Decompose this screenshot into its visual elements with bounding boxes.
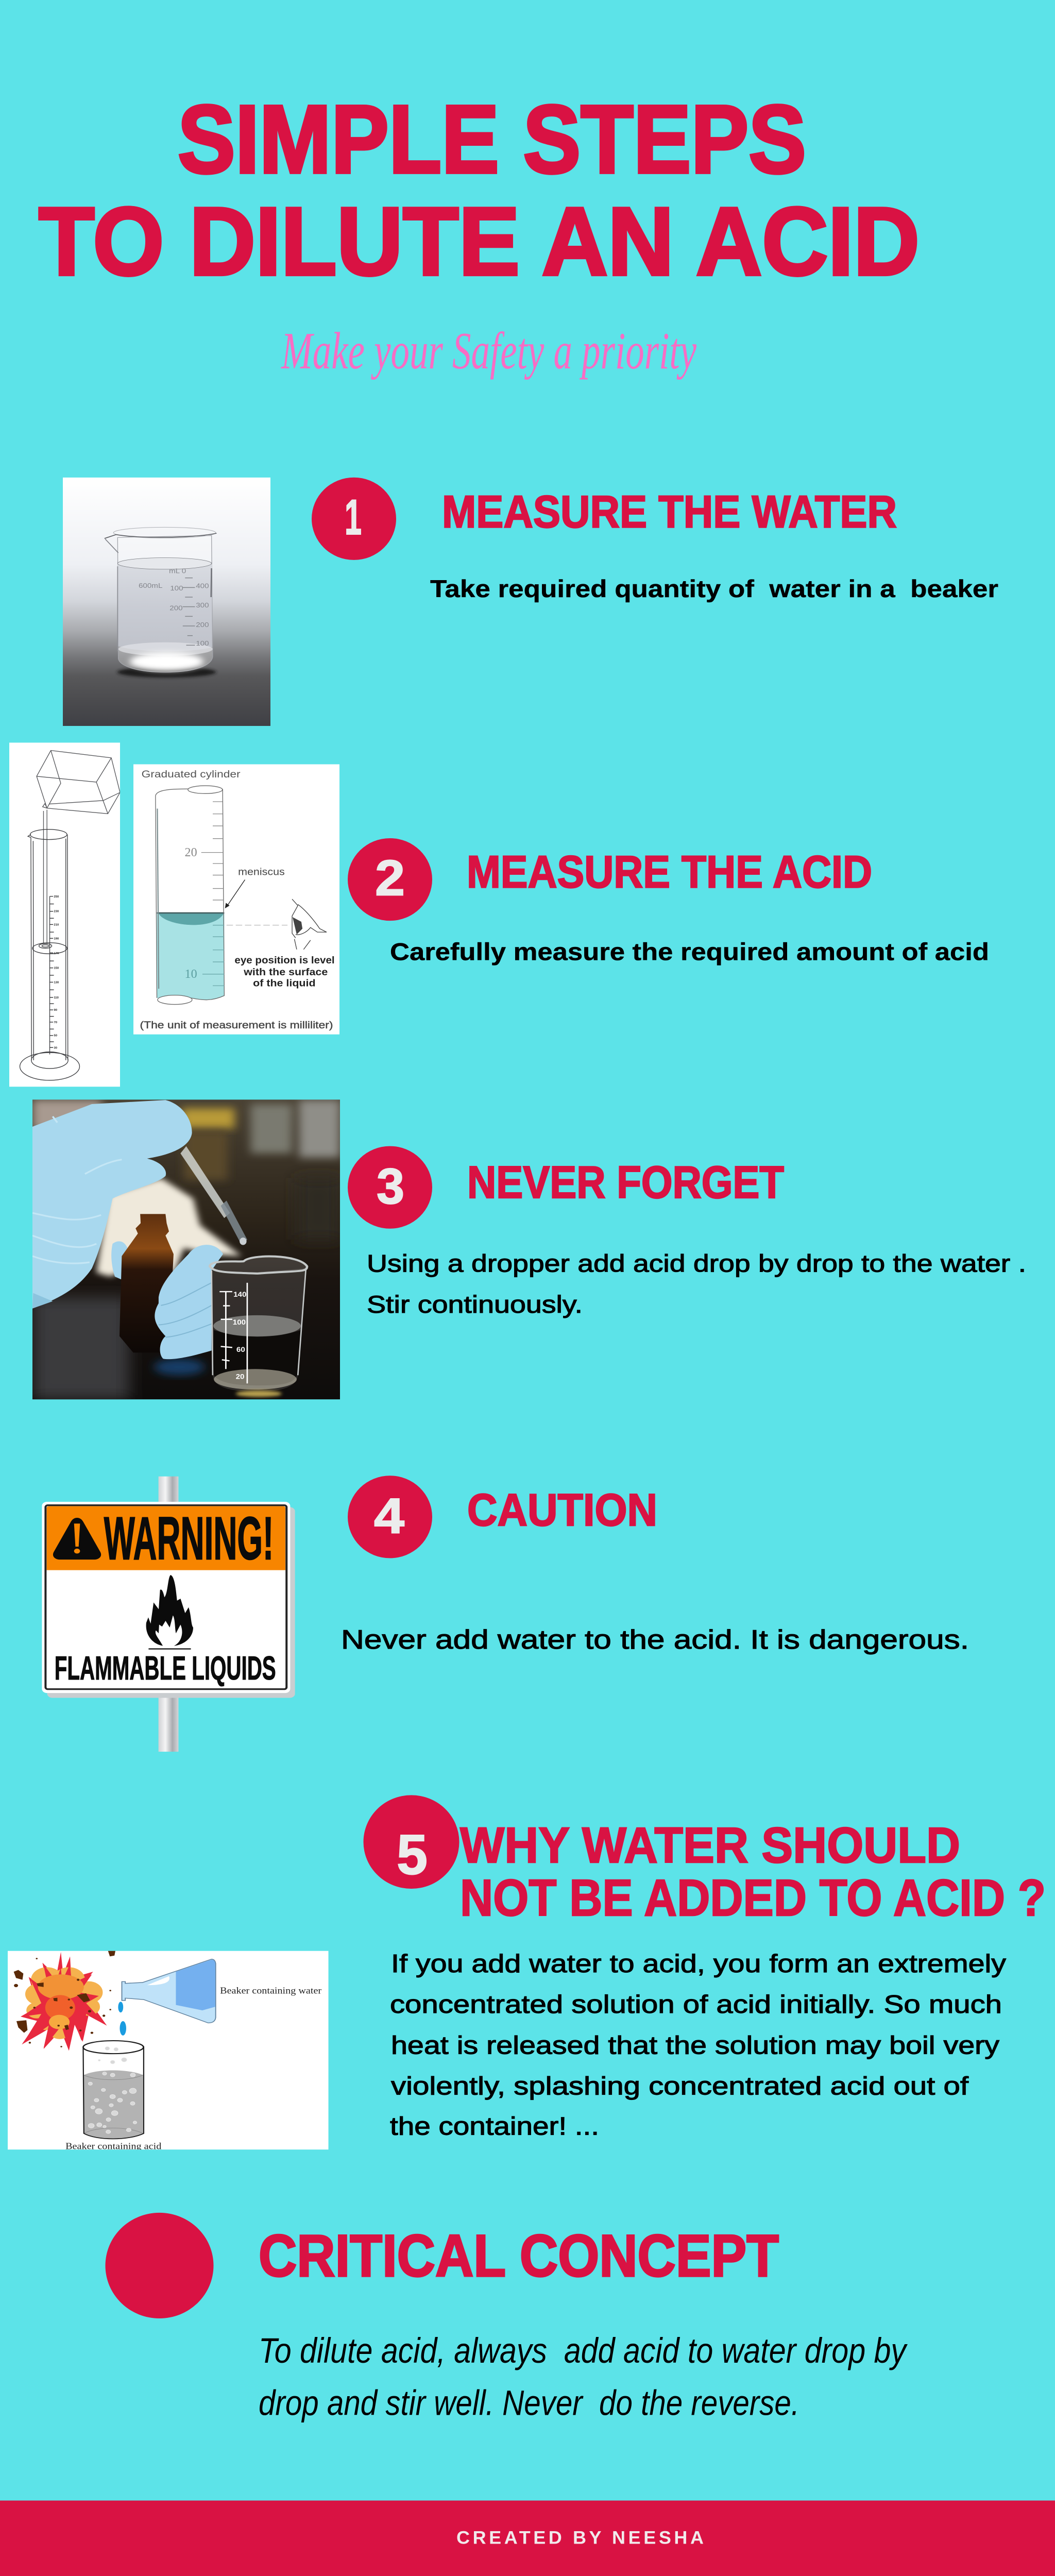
step 2 badge <box>348 838 432 921</box>
panel: step 2 meniscus diagram: with the surface <box>243 967 328 978</box>
step 5 text <box>390 1950 1006 2140</box>
step 5 text: the container! ... <box>390 2112 599 2140</box>
step 1 badge: 1 <box>345 489 362 545</box>
panel: step 2 meniscus diagram: meniscus <box>238 867 285 878</box>
step 4 badge: 4 <box>374 1488 404 1544</box>
title: TO DILUTE AN ACID <box>39 188 920 296</box>
panel: step 1 photo of beaker with water: 100 <box>170 584 183 592</box>
step 4 text: Never add water to the acid. It is dangerous. <box>341 1625 969 1655</box>
sign board <box>42 1502 295 1698</box>
panel: step 3 photo of dropper and beaker: 100 <box>233 1319 246 1327</box>
step 5 heading: WHY WATER SHOULD <box>460 1817 960 1873</box>
step 5 text: concentrated solution of acid initially. So much <box>390 1991 1002 2019</box>
panel: step 2 meniscus diagram: of the liquid <box>253 978 316 989</box>
step 4 heading: CAUTION <box>467 1484 657 1535</box>
step 2 badge: 2 <box>375 850 405 906</box>
panel: step 2 pouring into graduated cylinder: 110 <box>54 996 59 999</box>
critical concept heading: CRITICAL CONCEPT <box>259 2222 779 2289</box>
panel: step 1 photo of beaker with water <box>63 477 270 726</box>
warning triangle icon <box>53 1518 101 1560</box>
panel: step 3 photo of dropper and beaker: 140 <box>233 1291 246 1299</box>
step 1 badge <box>312 478 396 560</box>
critical concept text: To dilute acid, always add acid to water drop by <box>259 2331 908 2370</box>
step 5 text: violently, splashing concentrated acid out of <box>391 2072 968 2100</box>
step 5 text: heat is released that the solution may boil very <box>391 2031 999 2059</box>
footer bar <box>0 2501 1055 2576</box>
subtitle: Make your Safety a priority <box>281 322 696 380</box>
panel: step 1 photo of beaker with water: 600mL <box>139 582 163 589</box>
panel: step 1 photo of beaker with water: 200 <box>169 604 183 612</box>
step 1 heading: MEASURE THE WATER <box>442 486 897 537</box>
panel: step 2 pouring into graduated cylinder: 230 <box>54 910 59 913</box>
step 5 text: If you add water to acid, you form an extremely <box>391 1950 1006 1978</box>
panel: step 1 photo of beaker with water: 100 <box>196 639 209 647</box>
panel: step 1 photo of beaker with water: 400 <box>196 582 209 589</box>
step 2 text: Carefully measure the required amount of acid <box>390 939 989 965</box>
panel: step 1 photo of beaker with water: 200 <box>196 621 209 629</box>
panel: step 2 meniscus diagram: (The unit of measurement is milliliter) <box>140 1020 333 1031</box>
panel: step 2 meniscus diagram: Graduated cylinder <box>142 769 241 780</box>
footer bar: CREATED BY NEESHA <box>456 2528 704 2548</box>
panel: step 3 photo of dropper and beaker <box>32 1099 340 1399</box>
step 5 badge: 5 <box>397 1824 428 1886</box>
flame icon <box>146 1575 193 1650</box>
panel: step 2 pouring into graduated cylinder: 250 <box>54 895 59 899</box>
critical concept text: drop and stir well. Never do the reverse. <box>259 2383 799 2422</box>
critical concept text <box>259 2331 908 2422</box>
panel: step 4 warning sign <box>42 1477 295 1752</box>
panel: step 2 meniscus diagram <box>133 765 339 1035</box>
panel: step 5 explosion diagram <box>8 1951 329 2151</box>
panel: step 2 pouring into graduated cylinder: 190 <box>54 938 59 941</box>
step 3 text <box>367 1250 1026 1318</box>
critical concept badge <box>105 2213 213 2318</box>
panel: step 2 pouring into graduated cylinder: 170 <box>54 952 59 955</box>
flask of water <box>118 1959 216 2036</box>
sign post <box>159 1477 178 1752</box>
step 3 text: Using a dropper add acid drop by drop to the water . <box>367 1250 1026 1278</box>
step 4 badge <box>348 1476 432 1558</box>
panel: step 2 pouring into graduated cylinder: 130 <box>54 981 59 985</box>
panel: step 5 explosion diagram: Beaker containing acid <box>65 2142 161 2151</box>
panel: step 2 meniscus diagram: 20 <box>185 845 197 859</box>
panel: step 3 photo of dropper and beaker: 60 <box>236 1346 245 1354</box>
beaker of acid <box>83 2041 144 2139</box>
panel: step 2 meniscus diagram: eye position is level <box>234 955 335 966</box>
step 5 badge <box>364 1795 460 1889</box>
panel: step 3 photo of dropper and beaker: 20 <box>236 1373 244 1381</box>
step 5 heading <box>460 1817 1046 1927</box>
panel: step 1 photo of beaker with water: 300 <box>196 601 209 609</box>
panel: step 2 pouring into graduated cylinder: 210 <box>54 924 59 927</box>
panel: step 1 photo of beaker with water: mL 0 <box>169 567 186 574</box>
panel: step 2 pouring into graduated cylinder: 50 <box>54 1035 57 1038</box>
explosion <box>14 1951 115 2051</box>
step 2 heading: MEASURE THE ACID <box>467 846 872 897</box>
panel: step 2 pouring into graduated cylinder <box>9 743 120 1087</box>
step 3 badge: 3 <box>377 1158 404 1214</box>
panel: step 2 pouring into graduated cylinder: 30 <box>54 1046 57 1049</box>
panel: step 2 pouring into graduated cylinder: 90 <box>54 1009 57 1012</box>
title: SIMPLE STEPS <box>178 86 806 193</box>
title <box>39 86 920 296</box>
step 1 text: Take required quantity of water in a beaker <box>430 576 998 603</box>
panel: step 2 pouring into graduated cylinder: 70 <box>54 1021 57 1024</box>
panel: step 2 meniscus diagram: 10 <box>185 967 197 981</box>
step 3 badge <box>348 1146 432 1229</box>
step 3 heading: NEVER FORGET <box>467 1157 784 1208</box>
step 3 text: Stir continuously. <box>367 1291 583 1318</box>
panel: step 2 pouring into graduated cylinder: 150 <box>54 967 59 970</box>
